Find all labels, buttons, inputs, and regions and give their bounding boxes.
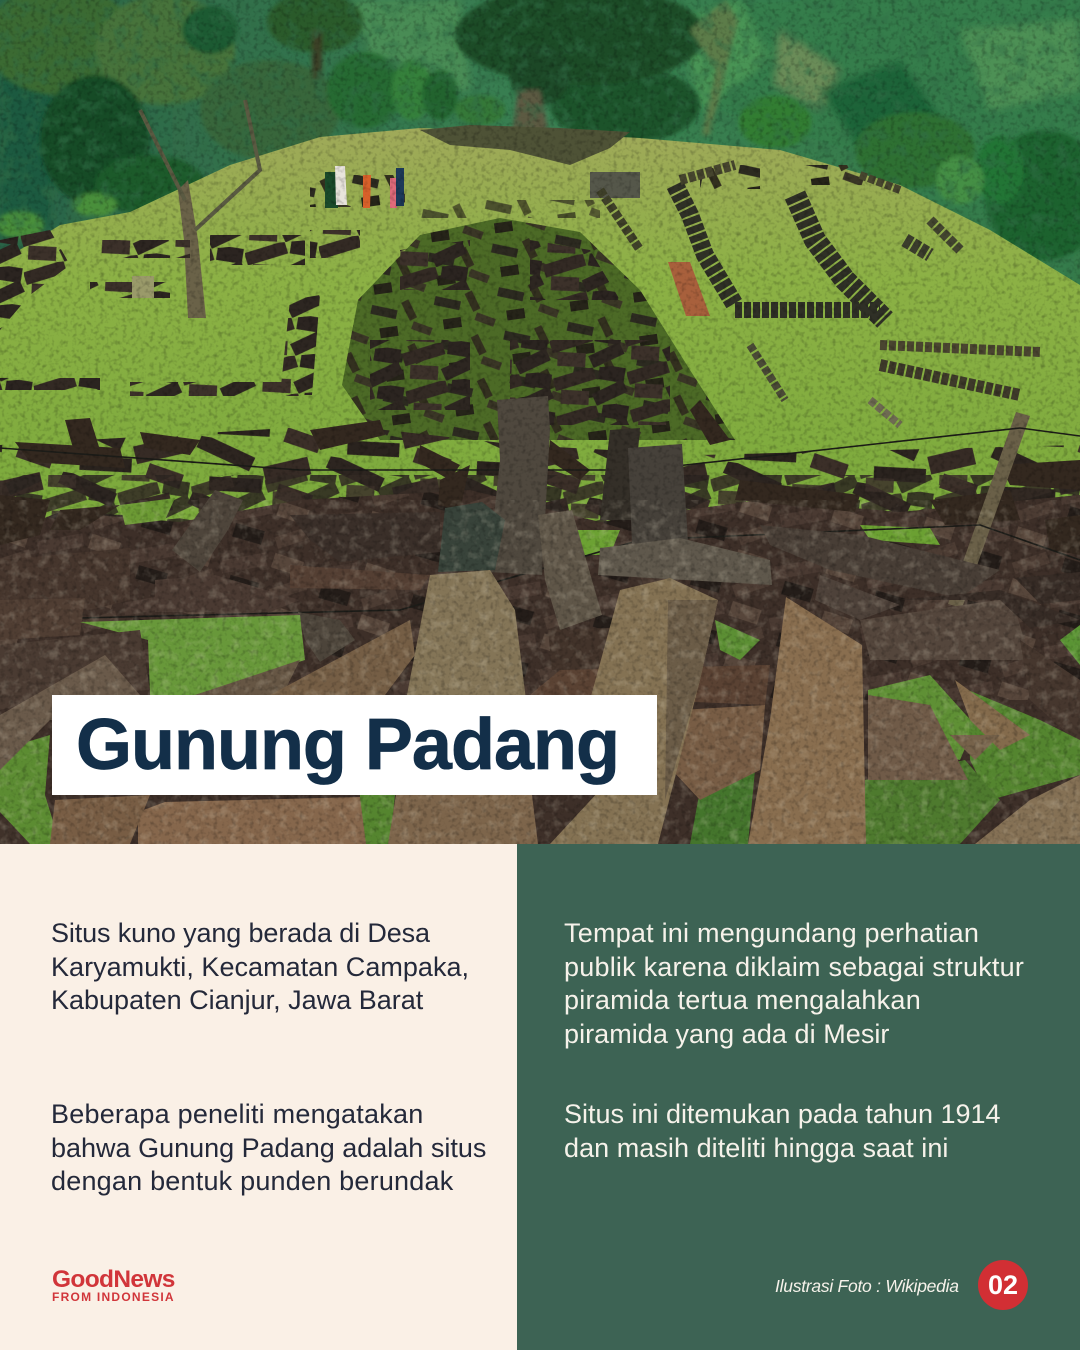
right terraced stone walls bbox=[600, 165, 1040, 425]
text: researchers: bahwa Gunung Padang adalah situs bbox=[51, 1133, 486, 1163]
title text: Gunung Padang bbox=[76, 705, 619, 785]
logo: GoodNews from Indonesia: FROM INDONESIA bbox=[52, 1290, 175, 1304]
text: pyramid claim: publik karena diklaim sebagai struktur bbox=[564, 952, 1024, 982]
panel: right text column bbox=[517, 844, 1080, 1350]
page number badge bbox=[978, 1260, 1028, 1310]
text: pyramid claim: piramida tertua mengalahkan bbox=[564, 985, 921, 1015]
large horizontal slabs bbox=[0, 512, 1080, 745]
logo: GoodNews from Indonesia: GoodNews bbox=[52, 1266, 175, 1293]
text: researchers: Beberapa peneliti mengatakan bbox=[51, 1099, 423, 1129]
text: pyramid claim: Tempat ini mengundang perhatian bbox=[564, 918, 979, 948]
stone scatter on the left slope bbox=[0, 230, 360, 396]
exposed red soil strip bbox=[668, 262, 710, 316]
forest background bbox=[0, 0, 1080, 450]
panel: left text column bbox=[0, 844, 517, 1350]
tree roots and stones on the summit bbox=[310, 125, 870, 218]
trees behind the hill bbox=[0, 0, 1080, 260]
scattered dark stones bbox=[0, 400, 1080, 555]
tree on the left of the hill bbox=[140, 100, 260, 318]
text: location: Kabupaten Cianjur, Jawa Barat bbox=[51, 985, 423, 1015]
photo credit: Ilustrasi Foto : Wikipedia bbox=[775, 1276, 959, 1296]
upright standing stones bbox=[172, 396, 688, 630]
text: location: Karyamukti, Kecamatan Campaka, bbox=[51, 952, 469, 982]
text: pyramid claim: piramida yang ada di Mesir bbox=[564, 1019, 889, 1049]
grassy hill bbox=[0, 128, 1080, 560]
stones on grass at mid distance bbox=[0, 425, 1080, 560]
text: discovery bbox=[564, 1099, 1000, 1163]
foreground tall weathered pillars bbox=[388, 570, 866, 844]
text: pyramid claim bbox=[564, 918, 1024, 1049]
photo: Gunung Padang megalithic site bbox=[0, 0, 1080, 844]
photo texture overlay bbox=[0, 0, 1080, 844]
text: researchers bbox=[51, 1099, 486, 1196]
text: location bbox=[51, 918, 469, 1015]
lower dense stone field bbox=[0, 490, 1080, 844]
grass patches in the foreground bbox=[0, 615, 1080, 844]
text: researchers: dengan bentuk punden berundak bbox=[51, 1166, 453, 1196]
title banner bbox=[52, 695, 657, 795]
page number badge: 02 bbox=[988, 1270, 1018, 1300]
text: location: Situs kuno yang berada di Desa bbox=[51, 918, 430, 948]
text: discovery: dan masih diteliti hingga saat ini bbox=[564, 1133, 948, 1163]
central terraced mound bbox=[342, 218, 735, 440]
foliage texture bbox=[0, 0, 1080, 285]
foreground fallen blocks bbox=[0, 620, 1080, 844]
text: discovery: Situs ini ditemukan pada tahun 1914 bbox=[564, 1099, 1000, 1129]
fence post and wire bbox=[0, 412, 1080, 618]
